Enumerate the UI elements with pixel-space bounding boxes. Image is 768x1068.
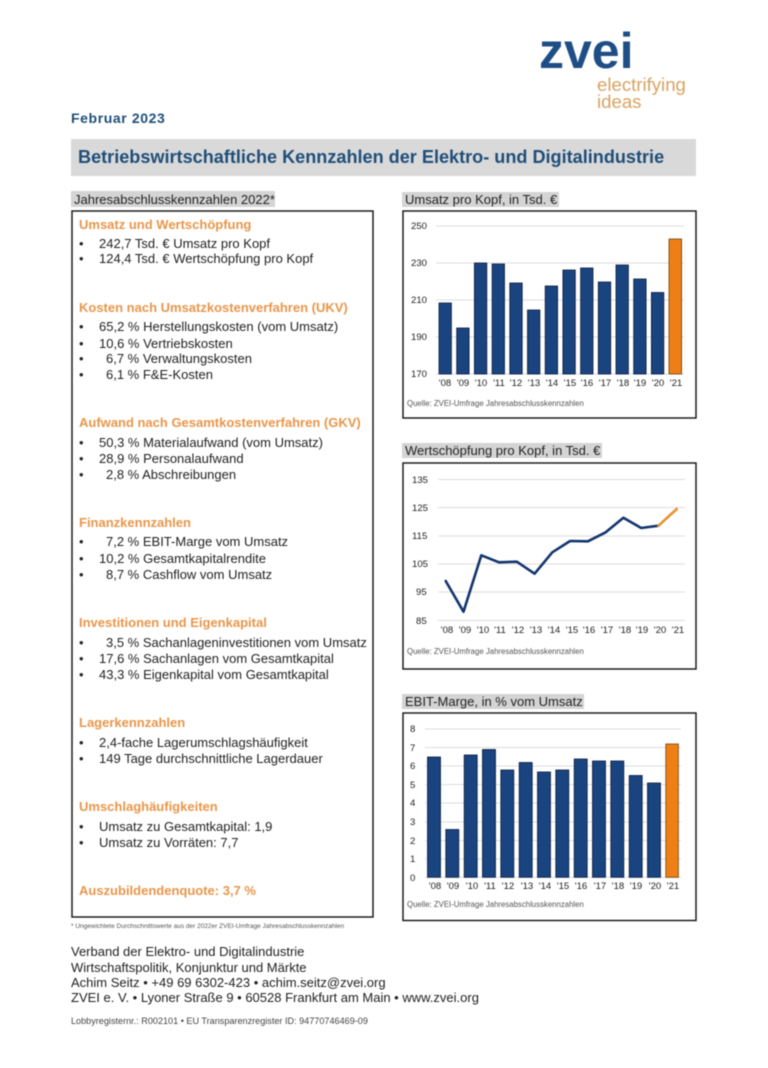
section: Umsatz und Wertschöpfung: 124,4 Tsd. € Wertschöpfung pro Kopf bbox=[99, 251, 314, 266]
contact block bbox=[71, 944, 479, 1005]
y axis labels: 3 bbox=[410, 817, 415, 828]
section: Lagerkennzahlen: • bbox=[79, 751, 84, 766]
section: Investitionen und Eigenkapital: • bbox=[79, 635, 84, 650]
x axis labels: '09 bbox=[457, 378, 469, 389]
x axis labels: '15 bbox=[564, 378, 576, 389]
x axis labels: '13 bbox=[528, 378, 540, 389]
footnote: * Ungewichtete Durchschnittswerte aus der 2022er ZVEI-Umfrage Jahresabschlusskennzahlen bbox=[71, 923, 345, 930]
y axis labels: 135 bbox=[412, 475, 428, 486]
x axis labels: '21 bbox=[672, 625, 684, 636]
section: Kosten nach UKV: • bbox=[79, 336, 84, 351]
logo: zvei electrifying ideas bbox=[539, 23, 686, 112]
chart heading: Wertschöpfung pro Kopf, in Tsd. € bbox=[405, 443, 601, 458]
x axis labels bbox=[429, 881, 679, 892]
y axis labels: 4 bbox=[410, 798, 416, 809]
section: Kosten nach UKV bbox=[79, 300, 348, 382]
section: Finanzkennzahlen: 7,2 % EBIT-Marge vom Umsatz bbox=[106, 534, 288, 549]
x axis labels: '17 bbox=[601, 625, 613, 636]
section: Investitionen und Eigenkapital bbox=[79, 615, 367, 682]
title banner: Betriebswirtschaftliche Kennzahlen der Elektro- und Digitalindustrie bbox=[78, 147, 664, 167]
y axis labels: 6 bbox=[410, 761, 415, 772]
section: Umsatz und Wertschöpfung: • bbox=[79, 251, 84, 266]
x axis labels: '14 bbox=[548, 625, 561, 636]
y axis labels: 115 bbox=[412, 531, 427, 542]
y axis labels: 85 bbox=[416, 616, 427, 627]
section: Finanzkennzahlen: 8,7 % Cashflow vom Umsatz bbox=[106, 567, 272, 582]
x axis labels: '11 bbox=[494, 625, 506, 636]
section: Finanzkennzahlen: • bbox=[79, 567, 84, 582]
panel heading: Jahresabschlusskennzahlen 2022* bbox=[74, 192, 275, 207]
x axis labels: '20 bbox=[652, 378, 664, 389]
section: Lagerkennzahlen: Lagerkennzahlen bbox=[79, 715, 185, 730]
x axis labels: '19 bbox=[636, 625, 648, 636]
panel frame bbox=[72, 211, 373, 917]
section: Finanzkennzahlen: Finanzkennzahlen bbox=[79, 515, 191, 530]
x axis labels: '15 bbox=[566, 625, 578, 636]
chart frame bbox=[403, 713, 696, 920]
x axis labels: '19 bbox=[634, 378, 646, 389]
y axis labels: 125 bbox=[412, 503, 428, 514]
x axis labels bbox=[441, 625, 684, 636]
x axis labels: '10 bbox=[475, 378, 487, 389]
x axis labels: '14 bbox=[546, 378, 559, 389]
source: Quelle: ZVEI-Umfrage Jahresabschlusskennzahlen bbox=[407, 647, 584, 656]
x axis labels: '09 bbox=[447, 881, 459, 892]
x axis labels bbox=[439, 378, 682, 389]
section: Finanzkennzahlen: 10,2 % Gesamtkapitalrendite bbox=[99, 551, 266, 566]
section: Investitionen und Eigenkapital: 43,3 % Eigenkapital vom Gesamtkapital bbox=[99, 667, 329, 682]
title banner bbox=[71, 139, 696, 176]
section: Investitionen und Eigenkapital: Investitionen und Eigenkapital bbox=[79, 615, 267, 630]
logo: zvei electrifying ideas: electrifying bbox=[597, 74, 686, 95]
section: Kosten nach UKV: • bbox=[79, 351, 84, 366]
section: Finanzkennzahlen: • bbox=[79, 551, 84, 566]
y axis labels: 230 bbox=[411, 258, 427, 269]
date heading: Februar 2023 bbox=[71, 110, 165, 126]
section: Aufwand nach GKV: 28,9 % Personalaufwand bbox=[99, 451, 244, 466]
x axis labels: '08 bbox=[439, 378, 451, 389]
chart heading: Umsatz pro Kopf, in Tsd. € bbox=[405, 192, 558, 207]
section: Lagerkennzahlen: 149 Tage durchschnittliche Lagerdauer bbox=[99, 751, 323, 766]
panel: Wertschöpfung pro Kopf bbox=[402, 443, 696, 669]
x axis labels: '08 bbox=[429, 881, 441, 892]
section: Umschlaghäufigkeiten: Umschlaghäufigkeiten bbox=[79, 799, 218, 814]
x axis labels: '12 bbox=[510, 378, 522, 389]
section: Investitionen und Eigenkapital: 3,5 % Sachanlageninvestitionen vom Umsatz bbox=[106, 635, 367, 650]
section: Kosten nach UKV: 65,2 % Herstellungskosten (vom Umsatz) bbox=[99, 319, 338, 334]
bar chart bbox=[439, 239, 682, 374]
y axis labels: 170 bbox=[411, 369, 427, 380]
panel: Umsatz pro Kopf bbox=[402, 192, 696, 418]
section: Kosten nach UKV: 10,6 % Vertriebskosten bbox=[99, 336, 233, 351]
section: Umsatz und Wertschöpfung bbox=[79, 217, 314, 266]
panel: Jahresabschlusskennzahlen bbox=[71, 191, 373, 917]
section: Aufwand nach GKV: 2,8 % Abschreibungen bbox=[106, 467, 236, 482]
section: Finanzkennzahlen bbox=[79, 515, 288, 582]
section: Aufwand nach GKV: • bbox=[79, 451, 84, 466]
y axis labels bbox=[412, 475, 428, 627]
x axis labels: '15 bbox=[557, 881, 569, 892]
y axis labels: 190 bbox=[411, 332, 427, 343]
section: Umschlaghäufigkeiten: • bbox=[79, 835, 84, 850]
y axis labels: 5 bbox=[410, 780, 415, 791]
logo: zvei electrifying ideas: ideas bbox=[597, 91, 641, 112]
section: Lagerkennzahlen bbox=[79, 715, 323, 766]
x axis labels: '16 bbox=[583, 625, 595, 636]
x axis labels: '11 bbox=[493, 378, 505, 389]
x axis labels: '10 bbox=[466, 881, 478, 892]
x axis labels: '09 bbox=[459, 625, 471, 636]
contact block: Achim Seitz • +49 69 6302-423 • achim.seitz@zvei.org bbox=[71, 975, 386, 990]
chart frame bbox=[403, 211, 696, 418]
x axis labels: '17 bbox=[594, 881, 606, 892]
x axis labels: '18 bbox=[612, 881, 624, 892]
section: Investitionen und Eigenkapital: 17,6 % Sachanlagen vom Gesamtkapital bbox=[99, 651, 334, 666]
x axis labels: '13 bbox=[521, 881, 533, 892]
y axis labels: 105 bbox=[412, 559, 428, 570]
x axis labels: '14 bbox=[539, 881, 552, 892]
x axis labels: '17 bbox=[599, 378, 611, 389]
logo: zvei electrifying ideas: zvei bbox=[539, 23, 634, 79]
source: Quelle: ZVEI-Umfrage Jahresabschlusskennzahlen bbox=[407, 900, 584, 909]
x axis labels: '20 bbox=[649, 881, 661, 892]
section: Umschlaghäufigkeiten: Umsatz zu Gesamtkapital: 1,9 bbox=[99, 819, 272, 834]
section: Umschlaghäufigkeiten: • bbox=[79, 819, 84, 834]
x axis labels: '11 bbox=[484, 881, 496, 892]
section: Finanzkennzahlen: • bbox=[79, 534, 84, 549]
section: Kosten nach UKV: Kosten nach Umsatzkostenverfahren (UKV) bbox=[79, 300, 348, 315]
section: Aufwand nach GKV: Aufwand nach Gesamtkostenverfahren (GKV) bbox=[79, 415, 361, 430]
y axis labels bbox=[410, 724, 416, 884]
section: Aufwand nach GKV: • bbox=[79, 435, 84, 450]
gridlines bbox=[436, 226, 684, 374]
x axis labels: '19 bbox=[630, 881, 642, 892]
section: Auszubildendenquote: Auszubildendenquote: 3,7 % bbox=[79, 883, 256, 898]
section: Kosten nach UKV: • bbox=[79, 319, 84, 334]
x axis labels: '16 bbox=[575, 881, 587, 892]
section: Investitionen und Eigenkapital: • bbox=[79, 651, 84, 666]
bar chart bbox=[428, 744, 678, 877]
section: Aufwand nach GKV bbox=[79, 415, 361, 482]
line chart bbox=[446, 509, 677, 612]
chart frame bbox=[403, 463, 696, 669]
gridlines bbox=[438, 480, 685, 620]
section: Kosten nach UKV: • bbox=[79, 367, 84, 382]
x axis labels: '12 bbox=[512, 625, 524, 636]
x axis labels: '18 bbox=[617, 378, 629, 389]
section: Investitionen und Eigenkapital: • bbox=[79, 667, 84, 682]
y axis labels: 8 bbox=[410, 724, 415, 735]
x axis labels: '20 bbox=[654, 625, 666, 636]
section: Umschlaghäufigkeiten: Umsatz zu Vorräten: 7,7 bbox=[99, 835, 238, 850]
x axis labels: '21 bbox=[667, 881, 679, 892]
x axis labels: '13 bbox=[530, 625, 542, 636]
section: Lagerkennzahlen: 2,4-fache Lagerumschlagshäufigkeit bbox=[99, 735, 308, 750]
x axis labels: '12 bbox=[502, 881, 514, 892]
y axis labels: 250 bbox=[411, 221, 427, 232]
panel: EBIT-Marge bbox=[402, 694, 696, 920]
section: Umsatz und Wertschöpfung: Umsatz und Wertschöpfung bbox=[79, 217, 251, 232]
section: Umsatz und Wertschöpfung: • bbox=[79, 236, 84, 251]
section: Aufwand nach GKV: • bbox=[79, 467, 84, 482]
y axis labels: 0 bbox=[410, 873, 415, 884]
x axis labels: '16 bbox=[581, 378, 593, 389]
contact block: Verband der Elektro- und Digitalindustrie bbox=[71, 944, 304, 959]
gridlines bbox=[425, 729, 681, 877]
source: Quelle: ZVEI-Umfrage Jahresabschlusskennzahlen bbox=[407, 399, 584, 408]
contact block: Wirtschaftspolitik, Konjunktur und Märkte bbox=[71, 960, 307, 975]
y axis labels: 95 bbox=[416, 587, 427, 598]
y axis labels: 210 bbox=[411, 295, 427, 306]
y axis labels: 7 bbox=[410, 743, 415, 754]
section: Umschlaghäufigkeiten bbox=[79, 799, 272, 850]
contact block: ZVEI e. V. • Lyoner Straße 9 • 60528 Frankfurt am Main • www.zvei.org bbox=[71, 990, 479, 1005]
x axis labels: '10 bbox=[477, 625, 489, 636]
x axis labels: '21 bbox=[670, 378, 682, 389]
section: Lagerkennzahlen: • bbox=[79, 735, 84, 750]
section: Kosten nach UKV: 6,7 % Verwaltungskosten bbox=[106, 351, 252, 366]
section: Umsatz und Wertschöpfung: 242,7 Tsd. € Umsatz pro Kopf bbox=[99, 236, 270, 251]
y axis labels: 1 bbox=[410, 854, 415, 865]
y axis labels bbox=[411, 221, 427, 380]
y axis labels: 2 bbox=[410, 836, 415, 847]
x axis labels: '08 bbox=[441, 625, 453, 636]
lobby register note: Lobbyregisternr.: R002101 • EU Transparenzregister ID: 94770746469-09 bbox=[71, 1016, 368, 1026]
section: Aufwand nach GKV: 50,3 % Materialaufwand (vom Umsatz) bbox=[99, 435, 323, 450]
x axis labels: '18 bbox=[619, 625, 631, 636]
section: Kosten nach UKV: 6,1 % F&E-Kosten bbox=[106, 367, 213, 382]
chart heading: EBIT-Marge, in % vom Umsatz bbox=[405, 694, 583, 709]
